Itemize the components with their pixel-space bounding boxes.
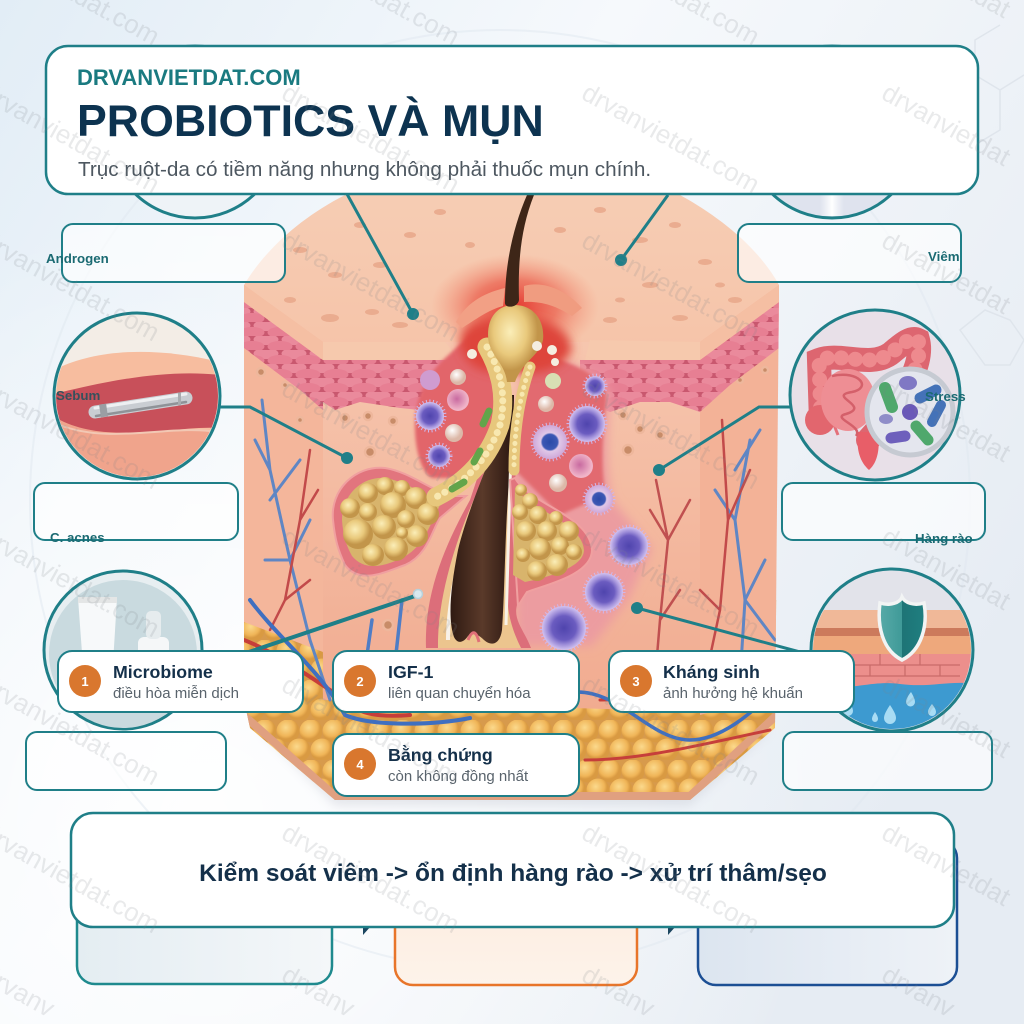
ducts (436, 347, 503, 497)
card 4: Bằng chứng: còn không đồng nhất (388, 768, 529, 785)
stray labels: Viêm (928, 249, 960, 264)
dermis front face (323, 342, 700, 712)
dermis left face (244, 348, 323, 652)
circle: implant inset (50, 313, 220, 480)
card 2: IGF-1: 2 (356, 674, 364, 689)
dermal pores (257, 367, 768, 630)
watermark: drvanvietdat.com (277, 77, 465, 199)
watermark: drvanvietdat.com (277, 521, 465, 643)
card 1: Microbiome: Microbiome (113, 662, 213, 682)
card 1: Microbiome (58, 651, 303, 712)
watermark: drvanvietdat (877, 373, 1016, 468)
watermark: drvanvietdat.com (577, 521, 765, 643)
watermark: drvanv (577, 959, 660, 1023)
inflamed zones (413, 340, 494, 480)
watermark: drvanvietdat.com (577, 669, 765, 791)
footer box: orange (395, 860, 637, 985)
takeaway banner (71, 813, 954, 927)
watermark: drvanvietdat.com (577, 77, 765, 199)
card 3: Kháng sinh (609, 651, 854, 712)
skin cross-section illustration (240, 190, 784, 810)
stray labels: Hàng rào (915, 531, 973, 546)
main title: PROBIOTICS VÀ MỤN (77, 96, 544, 146)
watermark: drvanvietdat.com (277, 669, 465, 791)
watermark: drvanvietdat (877, 225, 1016, 320)
circle: top-right inset (746, 46, 918, 218)
circle: skin barrier shield inset (810, 569, 975, 735)
dermis right face (700, 285, 779, 715)
takeaway banner: Kiểm soát viêm -> ổn định hàng rào -> xử trí thâm/sẹo (199, 860, 827, 887)
card 3: Kháng sinh: ảnh hưởng hệ khuẩn (663, 685, 803, 702)
card 2: IGF-1: liên quan chuyển hóa (388, 685, 531, 702)
immune cells (415, 341, 649, 651)
fat layer (244, 600, 784, 810)
card 4: Bằng chứng (333, 734, 579, 796)
watermark: drvanvietdat.com (577, 225, 765, 347)
brand line: DRVANVIETDAT.COM (77, 65, 301, 90)
sebaceous gland right (510, 478, 592, 606)
watermark: drvanvietdat.com (577, 373, 765, 495)
card 3: Kháng sinh: 3 (632, 674, 640, 689)
stray labels: Stress (925, 389, 966, 404)
follicle wall (426, 440, 531, 648)
watermark: drvanvietdat.com (277, 225, 465, 347)
watermark: drvanvietdat (877, 77, 1016, 172)
circle: top-left inset (109, 46, 281, 218)
arrow tips (363, 926, 676, 935)
watermark: drvanvietdat (877, 817, 1016, 912)
top skin surface (244, 190, 784, 350)
footer box: teal (77, 860, 332, 984)
watermark: drvanv (277, 959, 360, 1023)
subtitle: Trục ruột-da có tiềm năng nhưng không phải thuốc mụn chính. (78, 158, 651, 181)
card 1: Microbiome: 1 (81, 674, 89, 689)
footer box: blue (698, 840, 957, 985)
card 4: Bằng chứng: Bằng chứng (388, 744, 493, 765)
empty label boxes (26, 224, 992, 790)
card 4: Bằng chứng: 4 (356, 757, 364, 772)
watermark: drvanvietdat (877, 669, 1016, 764)
watermark: drvanvietdat (877, 521, 1016, 616)
callout lines (218, 194, 800, 655)
circle: skincare products inset (44, 571, 202, 729)
circle: gut microbiome inset (790, 310, 960, 480)
card 2: IGF-1 (333, 651, 579, 712)
card 3: Kháng sinh: Kháng sinh (663, 662, 760, 682)
watermark: drvanvietdat.com (577, 817, 765, 939)
watermark: drvanvietdat.com (277, 817, 465, 939)
stray labels: Androgen (46, 251, 109, 266)
bottom edge (240, 712, 780, 796)
stray labels: Sebum (56, 388, 100, 403)
title panel (46, 46, 978, 194)
stray labels (46, 249, 973, 546)
stray labels: C. acnes (50, 530, 105, 545)
card 1: Microbiome: điều hòa miễn dịch (113, 685, 239, 702)
watermark: drvanvietdat.com (277, 373, 465, 495)
blood vessels (244, 400, 775, 760)
pimple lips (456, 288, 505, 328)
sebaceous gland left (333, 468, 466, 576)
hair shaft (505, 195, 534, 307)
watermark: drvanv (877, 959, 960, 1023)
sebum plug (488, 305, 543, 382)
epidermis (323, 360, 446, 410)
card 2: IGF-1: IGF-1 (388, 662, 434, 682)
